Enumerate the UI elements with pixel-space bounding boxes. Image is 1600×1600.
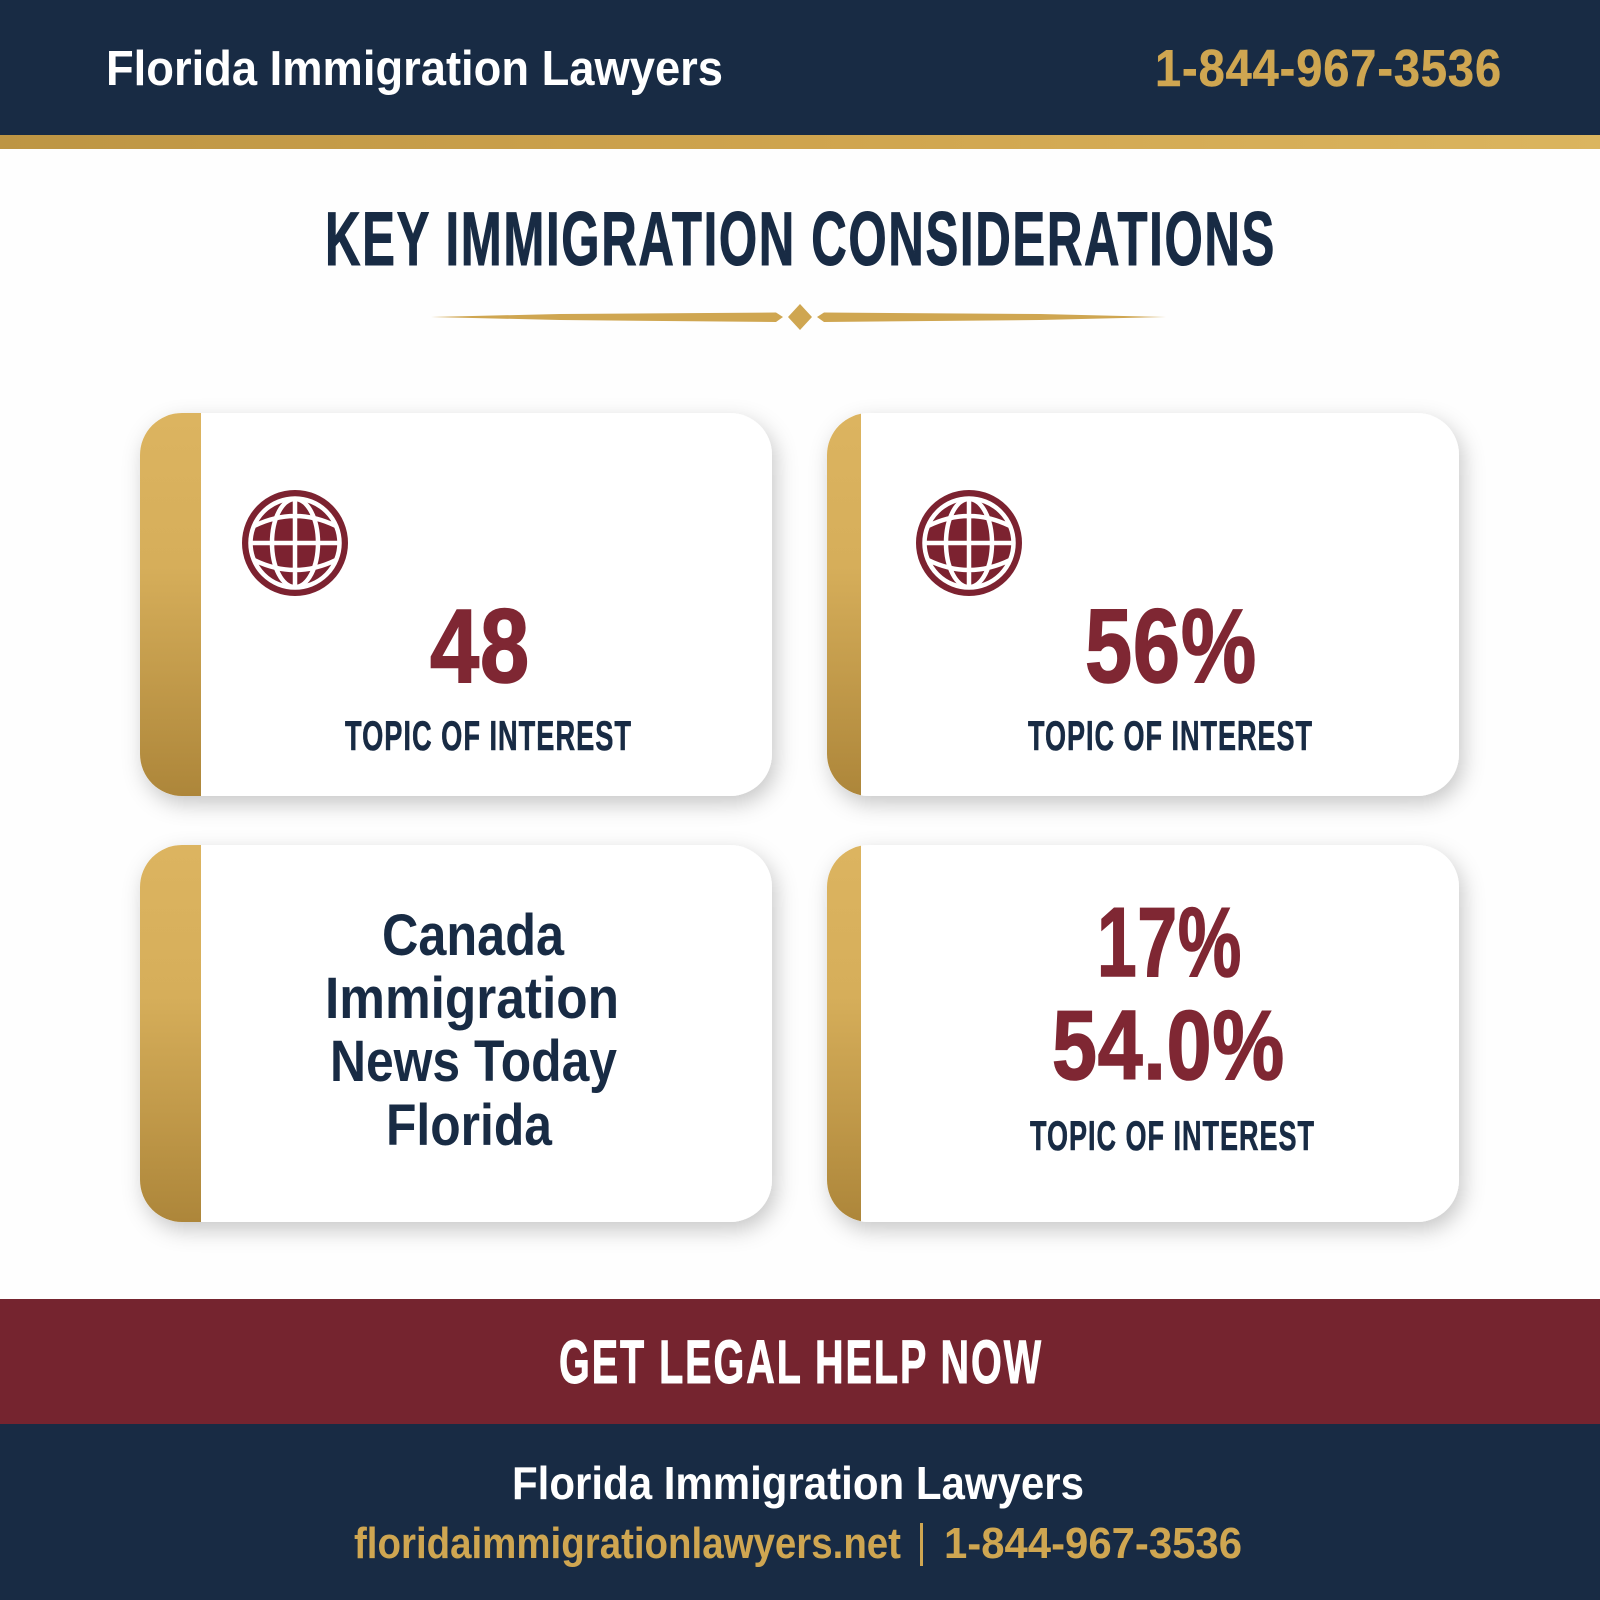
card label: TOPIC OF INTEREST <box>1030 1112 1315 1159</box>
card headline: Florida <box>386 1093 553 1158</box>
gold accent bar <box>827 413 861 796</box>
ornamental divider <box>431 304 1166 330</box>
gold accent bar <box>140 845 201 1222</box>
card: 17% and 54.0% <box>827 845 1459 1222</box>
call to action band <box>0 1299 1600 1424</box>
footer firm name: Florida Immigration Lawyers <box>512 1457 1084 1509</box>
card label: TOPIC OF INTEREST <box>345 712 632 759</box>
icon: globe <box>916 490 1022 596</box>
gold accent bar <box>140 413 201 796</box>
call to action text: GET LEGAL HELP NOW <box>559 1328 1043 1396</box>
footer <box>0 1424 1600 1600</box>
icon: globe <box>242 490 348 596</box>
card: Canada Immigration News Today Florida <box>140 845 772 1222</box>
footer website and phone: 1-844-967-3536 <box>944 1519 1242 1568</box>
gold accent bar <box>827 845 861 1222</box>
card headline: Canada <box>382 903 565 968</box>
card headline: Immigration <box>325 966 619 1031</box>
header bar <box>0 0 1600 149</box>
statistic 56%: 56% <box>1085 588 1257 705</box>
statistic 54.0%: 54.0% <box>1052 990 1285 1100</box>
statistic 17%: 17% <box>1097 887 1242 997</box>
card headline <box>325 903 619 1158</box>
card headline: News Today <box>330 1029 617 1094</box>
header phone number: 1-844-967-3536 <box>1155 40 1502 98</box>
card label: TOPIC OF INTEREST <box>1028 712 1313 759</box>
statistic 48: 48 <box>430 588 530 705</box>
card: 56% <box>827 413 1459 796</box>
card: 48 <box>140 413 772 796</box>
header firm name: Florida Immigration Lawyers <box>106 42 723 96</box>
footer website and phone: floridaimmigrationlawyers.net <box>354 1519 901 1568</box>
